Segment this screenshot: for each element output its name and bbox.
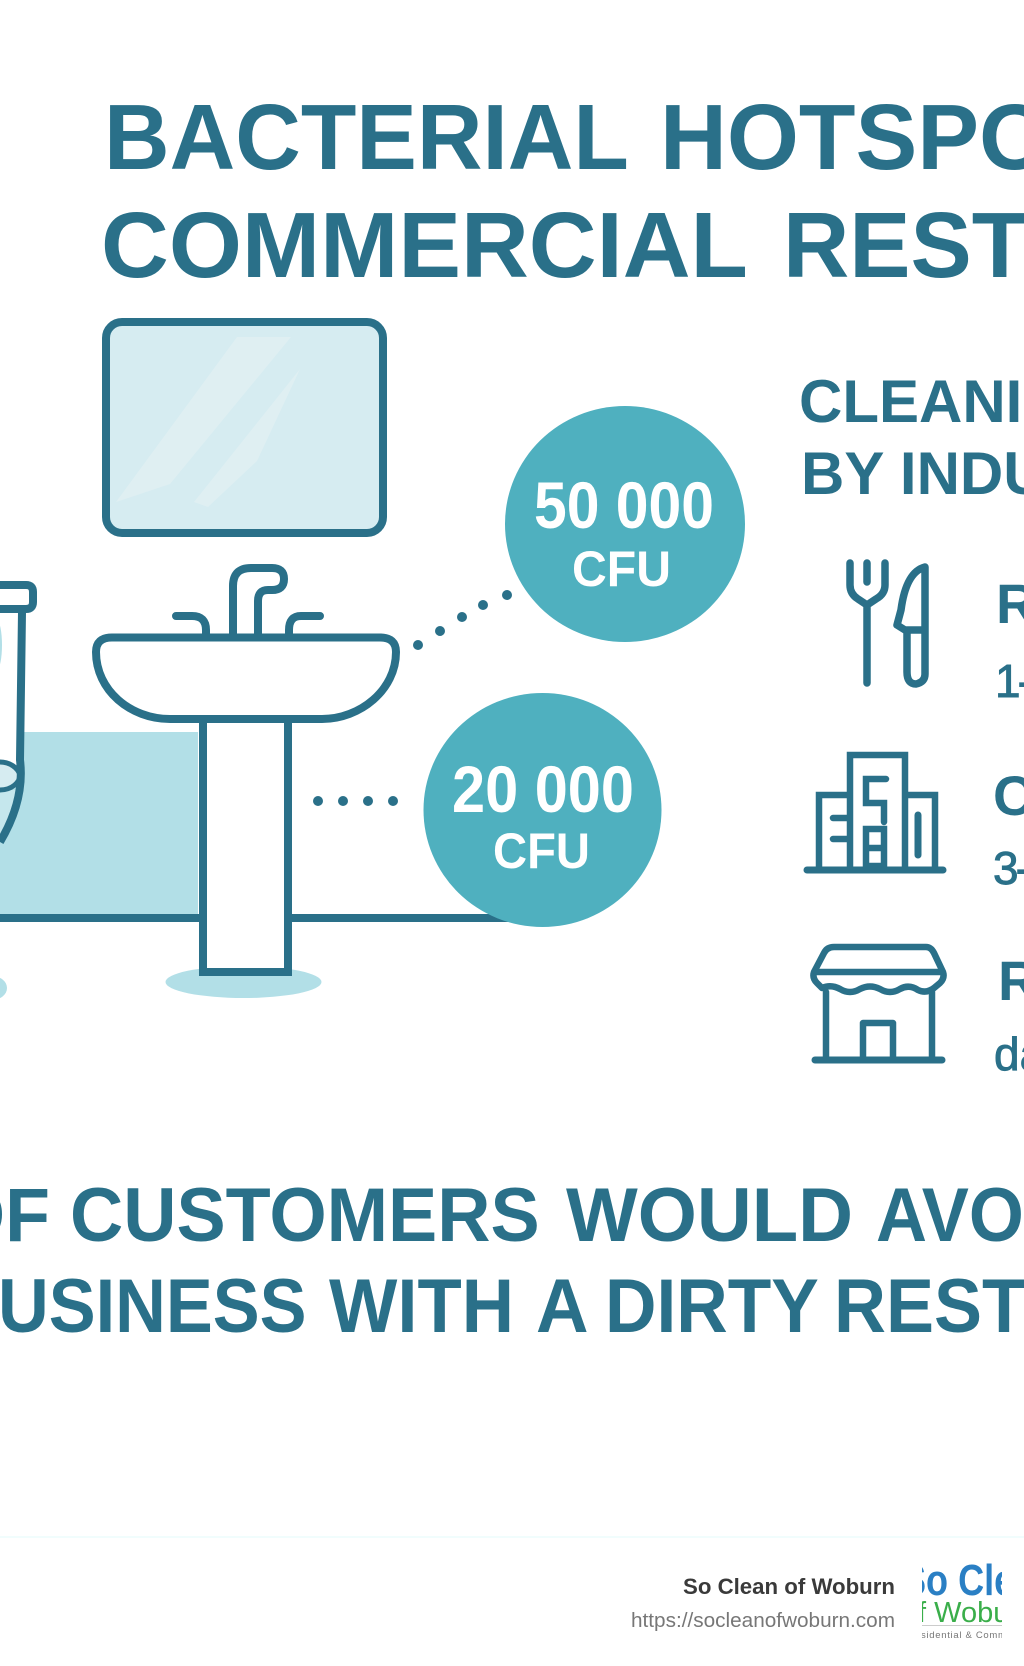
icon: office buildings [807, 755, 943, 870]
row: retail [994, 949, 1024, 1080]
bottom statistic statement: CUSTOMERS [70, 1172, 540, 1257]
bottom statistic statement: WOULD [566, 1173, 853, 1258]
panel heading [799, 368, 1024, 507]
floor shadow under pedestal [166, 966, 322, 998]
floor shadow under toilet [0, 976, 7, 1000]
bottom statistic statement: A [536, 1264, 589, 1348]
footer: logo [902, 1556, 1024, 1641]
wall tile panel [0, 732, 198, 914]
toilet [0, 585, 33, 842]
title [101, 85, 1024, 297]
floor line [0, 914, 510, 922]
panel: cleaning frequency by industry [799, 368, 1024, 1080]
bottom statistic statement [0, 1172, 1024, 1349]
callout: 50 000 CFU [505, 406, 745, 642]
connector dots to 50 000 [413, 590, 512, 650]
bottom statistic statement: WITH [329, 1263, 514, 1348]
footer: brand text [631, 1574, 895, 1632]
connector dots to 20 000 [313, 796, 398, 806]
title: COMMERCIAL [101, 192, 748, 297]
sink [96, 568, 396, 972]
callout: 50 000 CFU: 50 000 [534, 468, 714, 542]
callout: 20 000 CFU [424, 693, 662, 927]
illustration: restroom scene [0, 322, 745, 1000]
footer: brand text: So Clean of Woburn [683, 1574, 895, 1599]
footer divider [0, 1536, 1024, 1538]
icon: fork and knife [850, 563, 925, 684]
row: restaurants [995, 572, 1024, 707]
bottom statistic statement: DIRTY [605, 1263, 819, 1349]
callout: 20 000 CFU: CFU [493, 823, 590, 879]
footer: brand text: https://socleanofwoburn.com [631, 1610, 895, 1632]
title: BACTERIAL [104, 86, 629, 189]
callout: 50 000 CFU: CFU [572, 541, 671, 597]
callout: 20 000 CFU: 20 000 [452, 752, 634, 826]
bottom statistic statement: USINESS [0, 1263, 307, 1349]
mirror [106, 322, 383, 533]
row: corporate [993, 764, 1024, 894]
icon: storefront [813, 947, 944, 1060]
